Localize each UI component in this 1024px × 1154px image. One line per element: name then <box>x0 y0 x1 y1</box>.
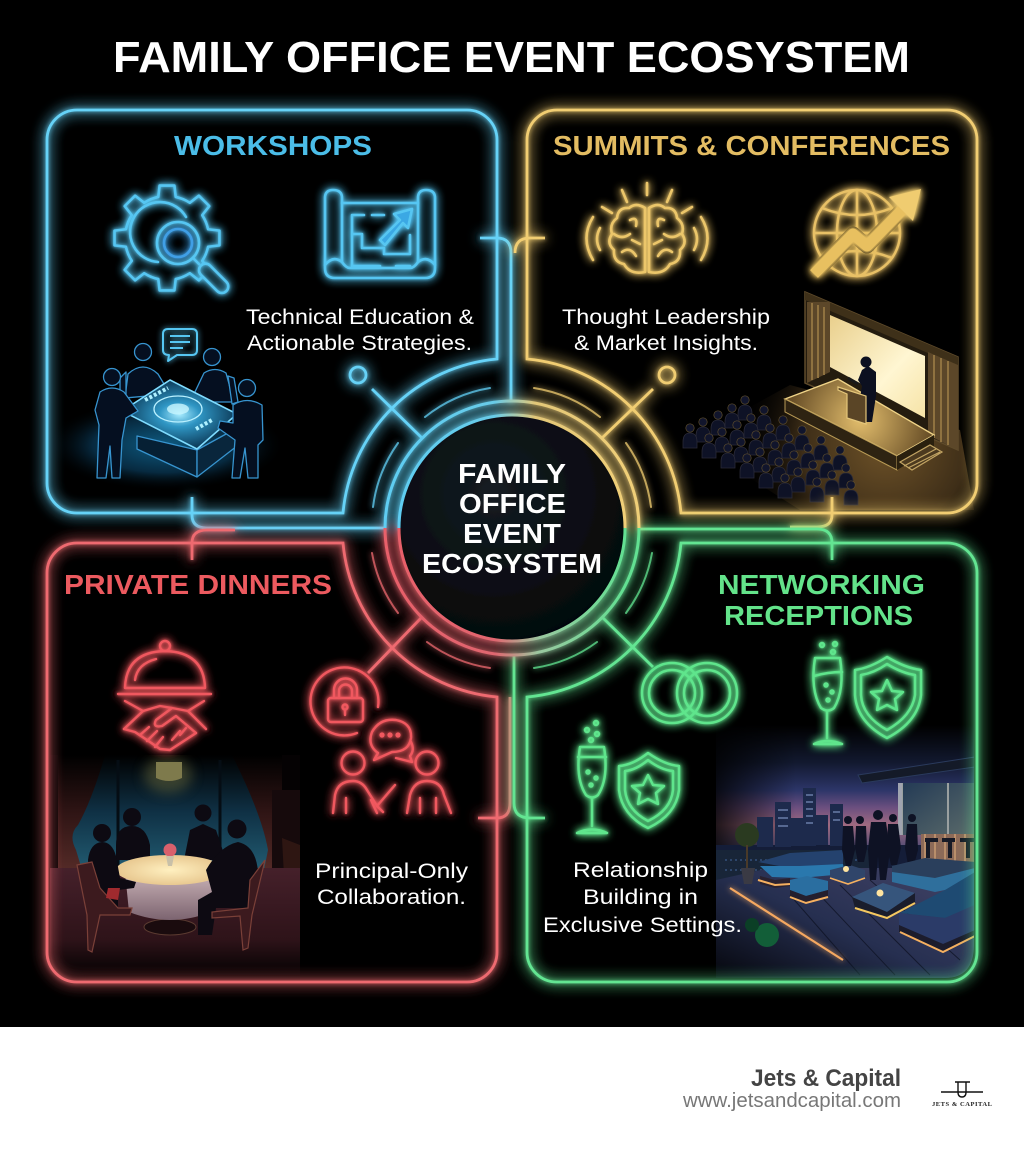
icon: brain <box>586 183 708 273</box>
icon: cloche and handshake <box>118 641 211 750</box>
text: private dinners description <box>315 860 469 909</box>
illustration: dining room <box>50 755 300 978</box>
hub title: FAMILY <box>458 458 566 489</box>
text: networking description <box>543 859 742 937</box>
icon: champagne flute upper <box>813 642 842 744</box>
outline: summits neon frame <box>515 110 977 527</box>
illustration: workshop table <box>45 344 285 491</box>
brand url: www.jetsandcapital.com <box>682 1090 901 1112</box>
title: FAMILY OFFICE EVENT ECOSYSTEM <box>113 33 910 82</box>
text: networking description: Exclusive Settings. <box>543 914 742 937</box>
icon: speech bubble <box>163 329 197 361</box>
icon: globe with rising arrow <box>814 189 921 276</box>
heading: networking receptions: RECEPTIONS <box>724 600 913 631</box>
text: private dinners description: Collaboration. <box>317 886 466 909</box>
illustration: rooftop lounge <box>716 725 976 980</box>
text: workshops description: Technical Education & <box>246 306 474 329</box>
icon: blueprint with arrow <box>325 190 435 278</box>
heading: private dinners: PRIVATE DINNERS <box>64 569 332 600</box>
icon: interlocked rings <box>642 663 737 723</box>
text: networking description: Relationship <box>573 859 708 882</box>
panel: networking receptions <box>543 569 976 980</box>
hub title: ECOSYSTEM <box>422 548 602 579</box>
heading: networking receptions: NETWORKING <box>718 569 925 600</box>
icon: lock in circle <box>310 667 378 735</box>
brand name: Jets & Capital <box>751 1065 901 1092</box>
far diners <box>116 804 226 860</box>
text: workshops description: Actionable Strategies. <box>247 332 472 355</box>
text: summits description: Thought Leadership <box>562 306 770 329</box>
text: summits description <box>562 306 770 355</box>
outline: private dinners neon frame <box>47 530 510 982</box>
footer band <box>0 1027 1024 1154</box>
illustration: conference stage <box>683 292 974 510</box>
panel: workshops <box>45 130 474 491</box>
icon: shield upper <box>855 657 921 738</box>
heading: summits and conferences: SUMMITS & CONFERENCES <box>553 130 950 161</box>
logo <box>932 1082 993 1108</box>
icon: gear with magnifier <box>115 186 231 296</box>
text: private dinners description: Principal-Only <box>315 860 469 883</box>
text: workshops description <box>246 306 474 355</box>
icon: champagne flute lower <box>577 721 607 833</box>
logo: JETS & CAPITAL <box>932 1101 993 1108</box>
near diners <box>88 820 258 935</box>
icon: two people talking <box>333 720 451 813</box>
outline: networking neon frame <box>514 529 977 982</box>
hub short arcs <box>372 388 652 668</box>
text: summits description: & Market Insights. <box>574 332 758 355</box>
center hub <box>372 388 652 668</box>
outline: workshops neon frame <box>47 110 511 528</box>
heading: workshops: WORKSHOPS <box>174 130 372 161</box>
hub title: EVENT <box>463 518 561 549</box>
heading: networking receptions <box>718 569 925 631</box>
panel: private dinners <box>50 569 469 978</box>
hub rings <box>385 401 639 655</box>
hub title: OFFICE <box>459 488 566 519</box>
hub title <box>422 458 602 579</box>
icon: shield lower <box>619 753 679 828</box>
text: networking description: Building in <box>583 886 698 909</box>
panel: summits and conferences <box>553 130 974 510</box>
